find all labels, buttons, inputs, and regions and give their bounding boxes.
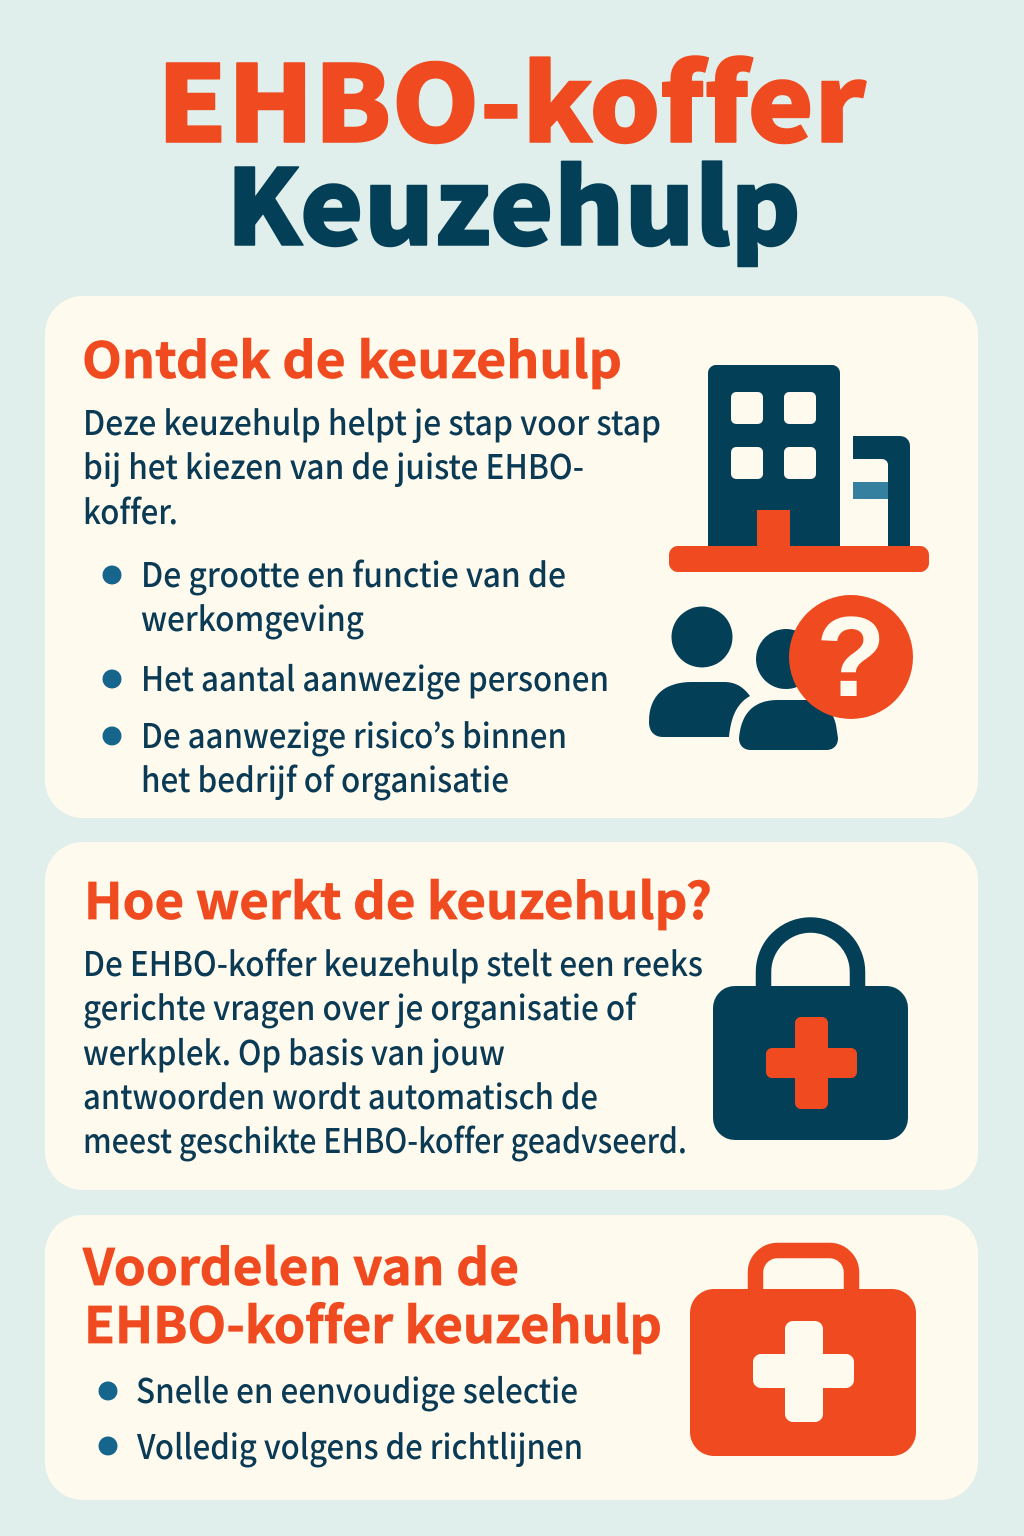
heading: voordelen: EHBO-koffer keuzehulp xyxy=(84,1286,662,1358)
title: Keuzehulp xyxy=(226,124,801,276)
bullet list: het bedrijf of organisatie xyxy=(141,753,509,802)
heading: ontdek: Ontdek de keuzehulp xyxy=(82,321,622,393)
bullet list: voordelen: Volledig volgens de richtlijnen xyxy=(136,1420,583,1469)
intro text: Deze keuzehulp helpt je stap voor stap xyxy=(83,396,661,445)
explanation text: gerichte vragen over je organisatie of xyxy=(83,981,637,1030)
icon: people with question mark: ? xyxy=(816,594,886,721)
explanation text: meest geschikte EHBO-koffer geadvseerd. xyxy=(83,1114,687,1163)
title xyxy=(157,19,867,276)
heading: voordelen: Voordelen van de xyxy=(82,1228,519,1300)
bullet list: Het aantal aanwezige personen xyxy=(141,652,609,701)
icon: orange first aid case xyxy=(690,1250,916,1456)
explanation text xyxy=(83,937,703,1163)
explanation text: De EHBO-koffer keuzehulp stelt een reeks xyxy=(83,937,703,986)
icon: people with question mark xyxy=(649,594,913,750)
intro text: bij het kiezen van de juiste EHBO- xyxy=(83,440,584,489)
bullet list: voordelen xyxy=(98,1364,583,1469)
panel: hoe werkt de keuzehulp xyxy=(45,842,978,1190)
icon: navy first aid bag xyxy=(713,925,908,1140)
bullet list: De grootte en functie van de xyxy=(141,548,566,597)
explanation text: werkplek. Op basis van jouw xyxy=(83,1026,505,1075)
title: EHBO-koffer xyxy=(157,19,867,173)
panel: ontdek de keuzehulp xyxy=(45,296,978,818)
bullet list: voordelen: Snelle en eenvoudige selectie xyxy=(136,1364,578,1413)
intro text xyxy=(83,396,661,534)
bullet list xyxy=(102,548,609,802)
heading: voordelen xyxy=(82,1228,662,1358)
explanation text: antwoorden wordt automatisch de xyxy=(83,1070,598,1119)
panel: voordelen xyxy=(45,1215,978,1500)
bullet list: De aanwezige risico’s binnen xyxy=(141,709,567,758)
icon: office building xyxy=(669,365,929,572)
heading: hoe werkt: Hoe werkt de keuzehulp? xyxy=(84,862,712,934)
bullet list: werkomgeving xyxy=(141,592,364,641)
intro text: koffer. xyxy=(83,485,178,534)
